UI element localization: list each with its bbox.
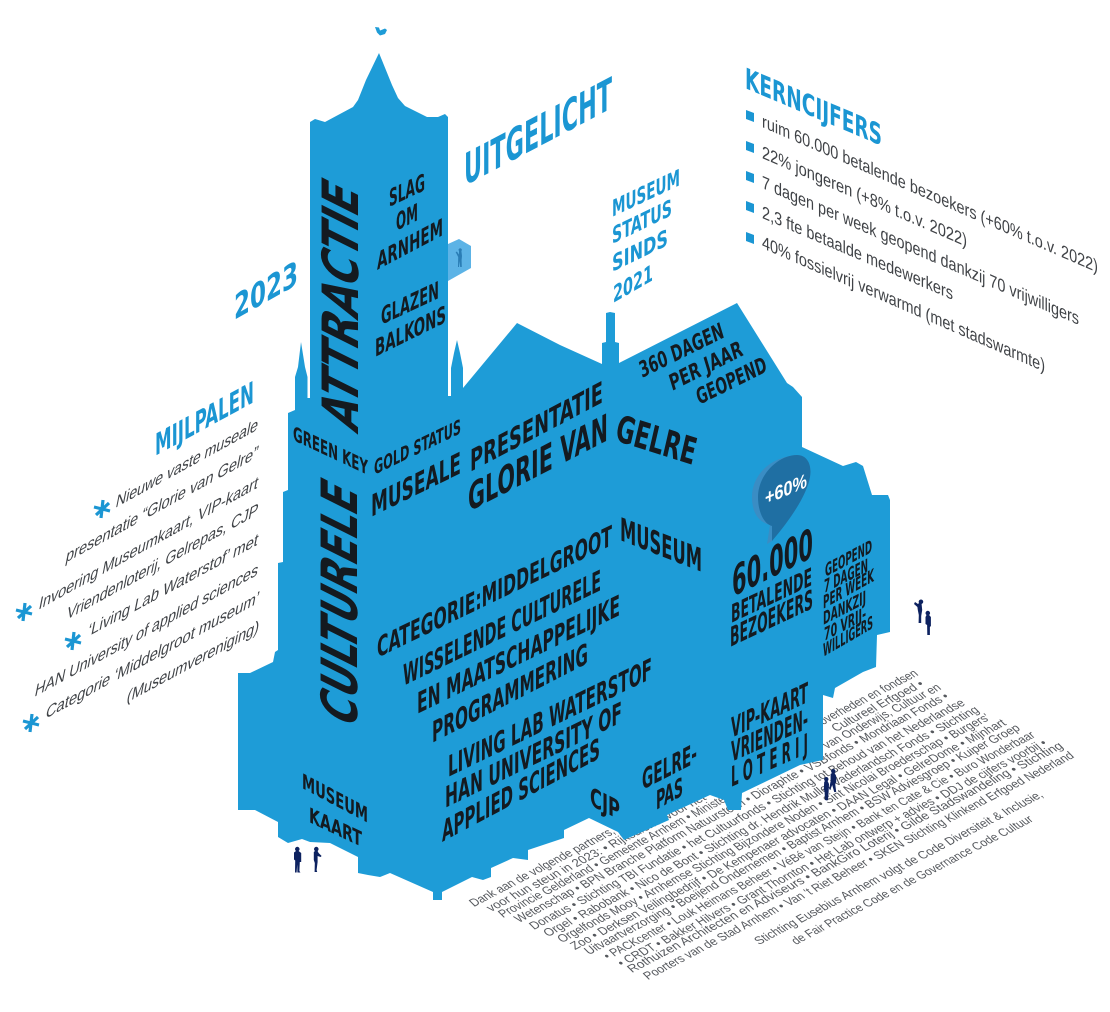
text: categorie middelgroot museum: MUSEUM: [620, 510, 702, 580]
text: green key gold status: [293, 414, 461, 480]
icon: flag on the spire: [375, 27, 387, 36]
partners text on the ground: • CRDT • Bakker Hilvers • Grant Thornton • Het Lab ontwerp + advies • DDJ de cijfers voorbij •: [614, 736, 1050, 969]
heading: culturele attractie on the tower: CULTURELE: [311, 469, 369, 736]
callout: +60% bubble: +60%: [765, 470, 807, 510]
text: 60.000 betalende bezoekers: BEZOEKERS: [730, 583, 813, 654]
text: slag om arnhem: [377, 168, 443, 277]
list: bullets: [746, 110, 754, 244]
people at right of building: [914, 599, 931, 635]
partners text on the ground: Orgel • Rabobank • Nico de Bont • Stichting dr. Hendrik Muller Vaderlandsch Fonds • Stichting: [540, 703, 982, 939]
text: geopend 7 dagen per week: WILLIGERS: [823, 611, 873, 662]
panel: mijlpalen: [16, 374, 261, 732]
text: green key gold status: GREEN KEY: [293, 421, 368, 480]
text: vip-kaart vriendenloterij: [731, 676, 808, 794]
text: glazen balkons: BALKONS: [375, 299, 446, 363]
text: gelrepas: [642, 737, 697, 817]
partners text on the ground: Zoo • Derksen Veilingbedrijf • De Kempenaer advocaten • DAAN Legal • GelreDome • Mijnhart: [567, 716, 1009, 952]
list: kerncijfers text: 22% jongeren (+8% t.o.v. 2022): [762, 142, 967, 251]
text: 360 dagen per jaar geopend: 360 DAGEN: [636, 318, 727, 384]
text: categorie middelgroot museum: CATEGORIE:MIDDELGROOT: [377, 519, 612, 665]
list: kerncijfers text: 40% fossielvrij verwarmd (met stadswarmte): [762, 232, 1045, 376]
text: slag om arnhem: SLAG: [389, 168, 425, 213]
icon: balcony on the tower: [448, 239, 471, 281]
text: museum status sinds 2021: MUSEUM: [612, 164, 680, 223]
text: cjp: CJP: [590, 780, 620, 827]
text: museale presentatie glorie van gelre: MUSEALE: [371, 447, 461, 525]
partners text on the ground: Orgelfonds Mooy • Arnhemse Stichting Bijzondere Noden • Sint Nicolai Broederschap • Burgers': [554, 711, 993, 945]
list: mijlpalen text: presentatie “Glorie van Gelre”: [64, 442, 260, 568]
heading: culturele attractie on the tower: [311, 169, 370, 736]
text: museumkaart: [302, 769, 368, 853]
partners text on the ground: van Onderwijs, Cultuur en: [819, 681, 944, 751]
building silhouette: [238, 53, 890, 900]
text: wisselende culturele en maatschappelijke programmering: EN MAATSCHAPPELIJKE: [417, 589, 620, 722]
partners text on the ground: voor hun steun in 2023: • Rijksdienst voor het: [483, 791, 709, 914]
list: mijlpalen text: Categorie ‘Middelgroot museum’: [44, 587, 261, 724]
text: living lab waterstof: LIVING LAB WATERSTOF: [448, 653, 652, 785]
text: museale presentatie glorie van gelre: GLORIE VAN: [468, 404, 608, 521]
text: geopend 7 dagen per week: 7 DAGEN: [824, 554, 868, 598]
list: mijlpalen text: Nieuwe vaste museale: [114, 414, 260, 513]
text: glazen balkons: [375, 276, 446, 363]
text: geopend 7 dagen per week: 70 VRIJ-: [824, 602, 866, 646]
partners text on the ground: Wetenschap • BPN Branche Platform Natuursteen • Dioraphte • VSBfonds • Mondriaan Fonds •: [511, 690, 952, 925]
text: slag om arnhem: OM: [396, 198, 418, 238]
text: glazen balkons: GLAZEN: [381, 276, 439, 331]
text: VRIENDEN-: [731, 702, 808, 769]
text: geopend 7 dagen per week: PER WEEK: [823, 564, 874, 614]
icons: blue asterisks: [16, 500, 110, 732]
list: mijlpalen text: [33, 414, 261, 724]
text: geopend 7 dagen per week: DANKZIJ: [823, 586, 866, 630]
partners text on the ground: Dank aan de volgende partners,: [466, 825, 618, 909]
text: slag om arnhem: ARNHEM: [377, 213, 443, 277]
list: mijlpalen text: HAN University of applied sciences: [33, 559, 260, 702]
text: green key gold status: GOLD STATUS: [374, 414, 461, 480]
text: 360 dagen per jaar geopend: GEOPEND: [693, 352, 770, 411]
partners text on the ground: Cultureel Erfgoed •: [828, 677, 927, 734]
text: wisselende culturele en maatschappelijke programmering: [403, 564, 620, 751]
text: museum status sinds 2021: [612, 164, 680, 309]
text: 60.000 betalende bezoekers: 60.000: [732, 519, 813, 607]
text: gelrepas: PAS: [656, 771, 683, 817]
list: kerncijfers text: 2,3 fte betaalde medewerkers: [762, 202, 953, 304]
list: mijlpalen text: (Museumvereniging): [125, 616, 261, 708]
panel: kerncijfers: [745, 62, 1098, 376]
text: wisselende culturele en maatschappelijke programmering: WISSELENDE CULTURELE: [403, 564, 601, 694]
list: mijlpalen text: ‘Living Lab Waterstof’ met: [86, 529, 261, 642]
text: 360 dagen per jaar geopend: [636, 318, 770, 411]
heading: kerncijfers: KERNCIJFERS: [745, 62, 882, 154]
list: mijlpalen text: Invoering Museumkaart, VIP-kaart: [37, 472, 261, 615]
text: vip-kaart vriendenloterij: VIP-KAART: [731, 676, 808, 745]
partners text on the ground: Stichting Eusebius Arnhem volgt de Code Diversiteit & Inclusie,: [751, 788, 1046, 947]
text: living lab waterstof: HAN UNIVERSITY OF: [445, 696, 622, 816]
text: museumkaart: KAART: [309, 803, 362, 853]
heading: culturele attractie on the tower: ATTRACTIE: [312, 169, 370, 441]
text: 60.000 betalende bezoekers: BETALENDE: [731, 563, 812, 630]
partners text on the ground: Rothuizen Architecten en Adviseurs • BankGiro Loterij • Gilde Stadswandeling • Stichting: [624, 739, 1066, 975]
text: museumkaart: MUSEUM: [302, 769, 368, 829]
partners text on the ground: Donatus • Stichting TBI Fundatie • het Cultuurfonds • Stichting tot Behoud van het Nederlandse: [526, 696, 968, 932]
callout: +60% bubble: [752, 455, 810, 544]
text: categorie middelgroot museum: [377, 510, 702, 665]
text: museale presentatie glorie van gelre: PRESENTATIE: [470, 374, 603, 479]
heading: mijlpalen: MIJLPALEN: [155, 374, 254, 463]
heading: 2023: 2023: [234, 252, 298, 328]
text: 360 dagen per jaar geopend: PER JAAR: [666, 336, 746, 397]
text: geopend 7 dagen per week: [823, 535, 874, 662]
partners text on the ground: overheden en fondsen: [815, 667, 921, 727]
text: museum status sinds 2021: SINDS: [612, 223, 668, 278]
partners text on the ground: Uitvaartverzorging • Boeijend Ondernemen • Baptist Arnhem • BSW Adviesgroep • Kuiper Groep: [581, 721, 1023, 957]
people at building corner: [824, 769, 836, 800]
partners text on the ground: Provincie Gelderland • Gemeente Arnhem • Ministerie: [495, 787, 740, 920]
text: gelrepas: GELRE-: [642, 737, 697, 798]
text: living lab waterstof: APPLIED SCIENCES: [442, 732, 600, 849]
text: museum status sinds 2021: STATUS: [612, 193, 672, 250]
text: museum status sinds 2021: 2021: [613, 259, 653, 309]
text: geopend 7 dagen per week: GEOPEND: [825, 535, 872, 582]
text: L O T E R I J: [731, 727, 808, 794]
people near museumkaart: [294, 847, 322, 872]
heading: uitgelicht: UITGELICHT: [464, 68, 612, 197]
text: museale presentatie glorie van gelre: [371, 374, 701, 525]
text: museale presentatie glorie van gelre: GELRE: [612, 406, 701, 474]
list: mijlpalen text: Vriendenloterij, Gelrepas, CJP: [65, 499, 260, 625]
partners text on the ground: de Fair Practice Code en de Governance Code Cultuur: [788, 812, 1037, 947]
text: 60.000 betalende bezoekers: [730, 519, 813, 654]
text: wisselende culturele en maatschappelijke programmering: PROGRAMMERING: [432, 637, 588, 751]
